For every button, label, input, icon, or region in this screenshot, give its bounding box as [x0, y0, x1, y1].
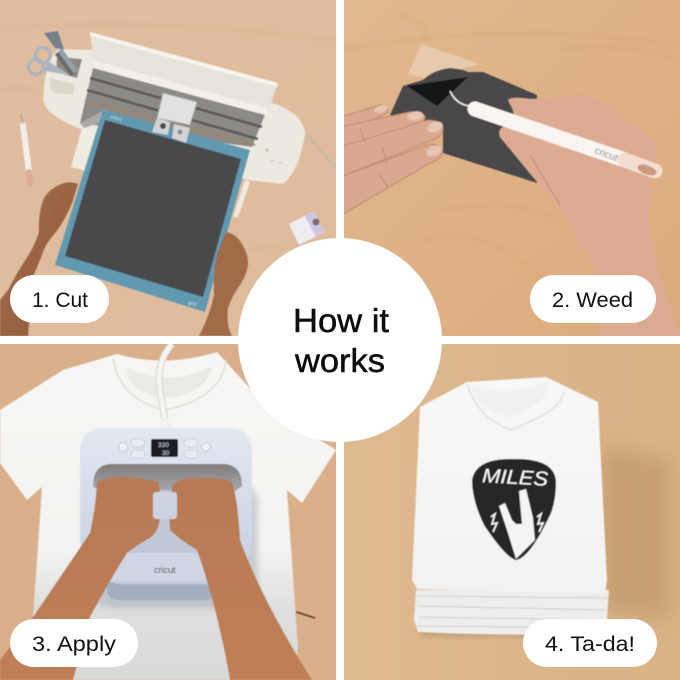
title: works [294, 342, 385, 379]
panel: 4. Ta-da! [344, 344, 680, 680]
label: 3. Apply: 3. Apply [32, 633, 117, 656]
label: 2. Weed: 2. Weed [552, 289, 633, 312]
rock hand [499, 489, 535, 559]
icon: right hand [199, 232, 248, 336]
icon: scissors and tools [28, 31, 76, 75]
label: 1. Cut [10, 275, 109, 323]
guitar pick graphic [472, 459, 556, 560]
mat [55, 110, 250, 312]
mat: cricut [109, 114, 123, 123]
t-shirt [0, 352, 336, 680]
icon: carriage [152, 93, 197, 143]
icon: right hand [499, 93, 680, 336]
icon: cable [306, 135, 336, 167]
icon: heat press [80, 428, 258, 608]
icon: left hand [340, 104, 444, 215]
center circle with title [238, 238, 442, 442]
label: 4. Ta-da!: 4. Ta-da! [545, 633, 635, 656]
label: 3. Apply [10, 619, 138, 667]
icon: cutting machine [43, 32, 305, 217]
title [293, 302, 389, 379]
vinyl sheet [390, 68, 537, 183]
title: How it [293, 302, 389, 339]
icon: tape roll [289, 211, 325, 245]
press handle [153, 492, 177, 519]
icon: left hand [0, 182, 78, 336]
icon: heat press: cricut [154, 565, 176, 575]
label: 2. Weed [530, 275, 656, 323]
icon: hands and arms [0, 477, 312, 680]
icon: power cord [159, 344, 172, 428]
icon: heat press: 30 [162, 450, 170, 457]
icon: weeding tool: cricut [593, 145, 619, 164]
mat: grid [187, 300, 197, 308]
storage tray [56, 57, 82, 78]
backing sheet [408, 44, 480, 78]
folded t-shirt stack [412, 377, 609, 635]
panel: 1. Cut [0, 0, 336, 336]
icon: heat press: 330 [158, 442, 169, 449]
panel: 2. Weed [340, 0, 680, 336]
pick lettering: MILES [482, 465, 549, 491]
icon: weeding tool [450, 91, 658, 178]
icon: weeding tool [21, 114, 30, 183]
label: 1. Cut: 1. Cut [32, 289, 88, 312]
wood knot [296, 612, 315, 618]
panel: 3. Apply [0, 344, 336, 680]
label: 4. Ta-da! [523, 619, 657, 667]
